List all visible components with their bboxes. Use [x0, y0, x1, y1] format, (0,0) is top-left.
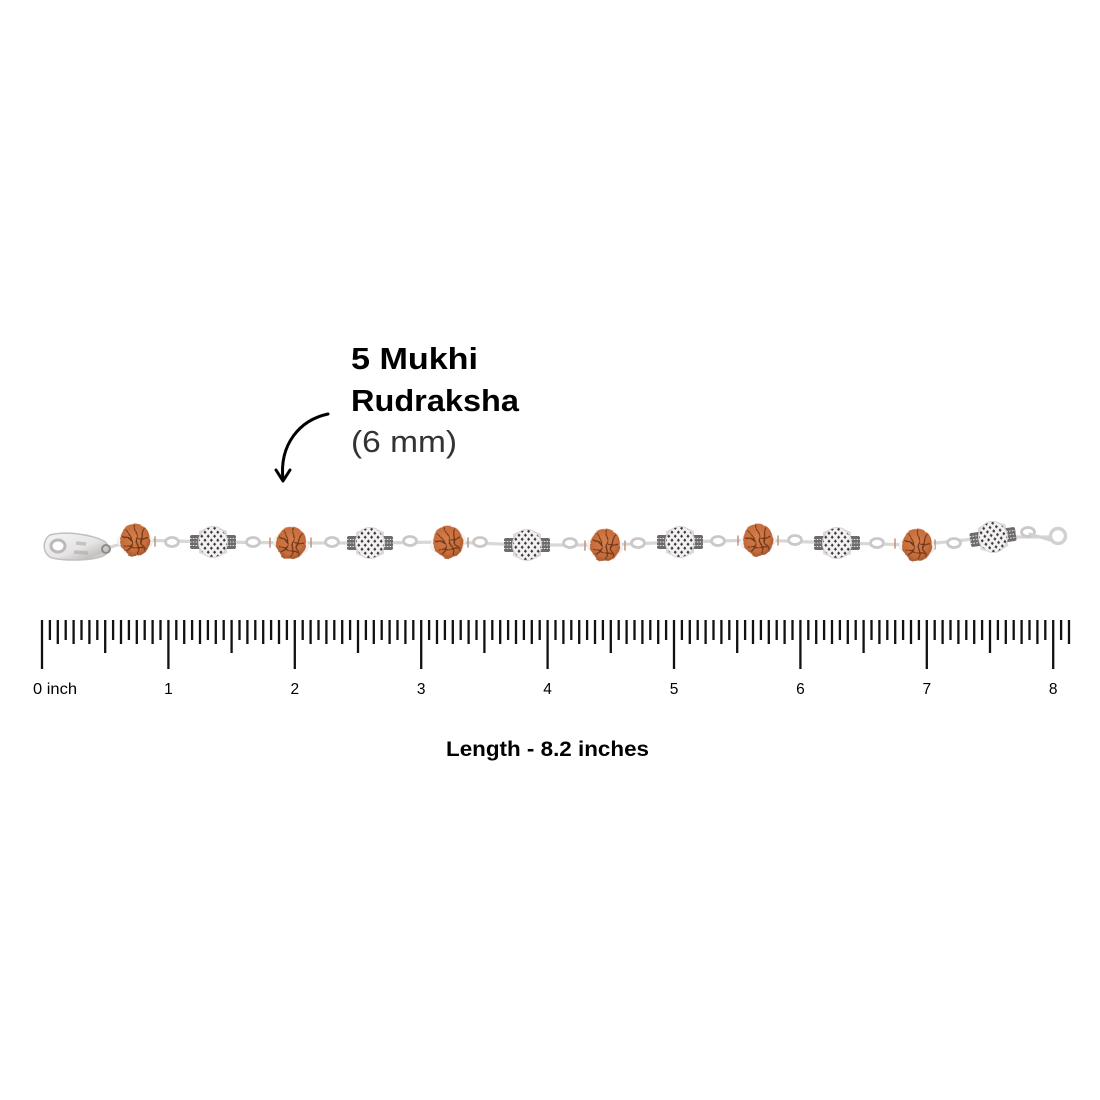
- ruler labels: 2: [290, 681, 299, 698]
- rudraksha bead 6: [898, 527, 936, 563]
- heading: 5 Mukhi Rudraksha (6 mm): 5 Mukhi: [351, 341, 478, 376]
- heading: 5 Mukhi Rudraksha (6 mm): Rudraksha: [351, 383, 520, 418]
- arrow pointing to rudraksha bead: [276, 414, 328, 481]
- silver wire chain: [100, 528, 1052, 550]
- silver bead 1: [190, 526, 236, 558]
- silver bead 4: [657, 526, 703, 558]
- ruler: [33, 620, 1069, 698]
- rudraksha bead 2: [270, 523, 312, 563]
- silver bead 5: [814, 528, 860, 558]
- end ring: [1030, 528, 1066, 544]
- ruler labels: 3: [417, 681, 426, 698]
- ruler labels: 4: [543, 681, 552, 698]
- rudraksha bead 1: [117, 524, 153, 556]
- silver bead 2: [347, 528, 393, 558]
- ruler labels: [33, 681, 1058, 698]
- rudraksha bead 5: [738, 522, 778, 558]
- ruler labels: 8: [1049, 681, 1058, 698]
- ruler labels: 5: [670, 681, 678, 698]
- ruler labels: 0 inch: [33, 681, 77, 698]
- heading: 5 Mukhi Rudraksha (6 mm): (6 mm): [351, 424, 457, 459]
- ruler labels: 1: [164, 681, 173, 698]
- length caption: Length - 8.2 inches: [446, 738, 649, 761]
- bracelet: [44, 518, 1065, 564]
- ruler labels: 7: [922, 681, 931, 698]
- heading: 5 Mukhi Rudraksha (6 mm): [351, 341, 520, 459]
- rudraksha bead 4: [585, 526, 625, 564]
- silver bead 3: [504, 530, 550, 560]
- rudraksha bead 3: [427, 522, 469, 562]
- ruler ticks: [42, 620, 1069, 669]
- ruler labels: 6: [796, 681, 805, 698]
- lobster clasp: [44, 533, 110, 560]
- silver bead 6: [968, 518, 1018, 556]
